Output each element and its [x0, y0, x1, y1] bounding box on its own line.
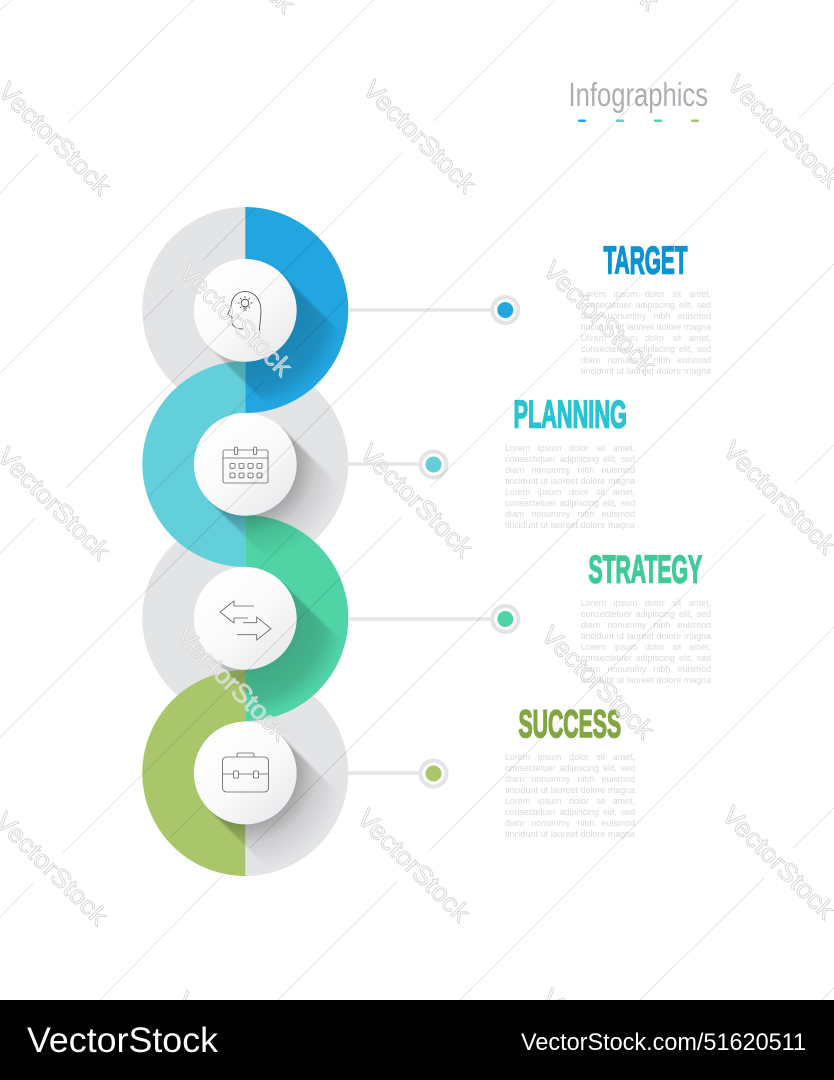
text block: target: tincidunt ut laoreet dolore magna: [581, 366, 711, 376]
text block: strategy: Lorem ipsum dolor sit amet,: [581, 642, 711, 652]
watermark pattern: VectorStock: [173, 257, 299, 383]
long shadows: [208, 274, 336, 859]
text block: planning: consectetuer adipiscing elit, sed: [505, 498, 635, 508]
text block: planning: Lorem ipsum dolor sit amet,: [505, 487, 635, 497]
text block: success: tincidunt ut laoreet dolore magna: [505, 829, 635, 839]
gray half circles: [142, 207, 348, 876]
infographic title: [568, 76, 708, 122]
text block: planning: consectetuer adipiscing elit, sed: [505, 454, 635, 464]
text block: success: consectetuer adipiscing elit, sed: [505, 807, 635, 817]
text block: target: Lorem ipsum dolor sit amet,: [581, 333, 711, 343]
text block: success: [505, 752, 635, 839]
heading: strategy: STRATEGY: [588, 548, 702, 592]
inner white discs: [194, 259, 297, 824]
text block: success: tincidunt ut laoreet dolore magna: [505, 785, 635, 795]
icon: briefcase: [222, 753, 268, 792]
text block: strategy: Lorem ipsum dolor sit amet,: [581, 598, 711, 608]
text block: strategy: tincidunt ut laoreet dolore magna: [581, 675, 711, 685]
watermark pattern: VectorStock: [170, 621, 296, 747]
segment: planning teal half: [142, 361, 245, 567]
text block: planning: [505, 443, 635, 530]
connector and marker: planning: [348, 450, 448, 480]
text block: target: Lorem ipsum dolor sit amet,: [581, 289, 711, 299]
text block: planning: Lorem ipsum dolor sit amet,: [505, 443, 635, 453]
watermark pattern: VectorStock: [354, 438, 480, 564]
footer bar: [0, 1000, 834, 1080]
segment: target blue half: [245, 207, 348, 413]
segment: success olive half: [142, 670, 245, 876]
icon: exchange arrows: [220, 601, 271, 640]
text block: strategy: diam nonummy nibh euismod: [581, 620, 711, 630]
text block: strategy: consectetuer adipiscing elit, sed: [581, 609, 711, 619]
text block: success: consectetuer adipiscing elit, sed: [505, 763, 635, 773]
watermark pattern: VectorStock: [716, 800, 834, 926]
watermark pattern: VectorStock: [351, 803, 477, 929]
text block: target: consectetuer adipiscing elit, sed: [581, 300, 711, 310]
icon: calendar: [223, 447, 268, 483]
watermark pattern: VectorStock: [537, 255, 663, 381]
watermark pattern: VectorStock: [357, 74, 483, 200]
text block: success: diam nonummy nibh euismod: [505, 818, 635, 828]
text block: planning: tincidunt ut laoreet dolore magna: [505, 520, 635, 530]
text block: success: diam nonummy nibh euismod: [505, 774, 635, 784]
text block: success: Lorem ipsum dolor sit amet,: [505, 796, 635, 806]
text block: target: diam nonummy nibh euismod: [581, 355, 711, 365]
heading: target: TARGET: [604, 240, 688, 282]
text block: strategy: diam nonummy nibh euismod: [581, 664, 711, 674]
heading: success: SUCCESS: [518, 703, 621, 746]
text block: planning: tincidunt ut laoreet dolore magna: [505, 476, 635, 486]
icon: head with light bulb: [228, 292, 261, 331]
watermark pattern: VectorStock: [535, 620, 661, 746]
chain of four overlapping circles: [142, 207, 365, 893]
text block: target: [581, 289, 711, 376]
text block: target: consectetuer adipiscing elit, sed: [581, 344, 711, 354]
footer image id: VectorStock.com/51620511: [521, 1029, 806, 1056]
text block: target: diam nonummy nibh euismod: [581, 311, 711, 321]
connector and marker: strategy: [348, 604, 520, 634]
watermark pattern: VectorStock: [717, 435, 834, 561]
text block: strategy: [581, 598, 711, 685]
infographic title: Infographics: [568, 76, 708, 113]
text block: success: Lorem ipsum dolor sit amet,: [505, 752, 635, 762]
text block: planning: diam nonummy nibh euismod: [505, 509, 635, 519]
text block: target: tincidunt ut laoreet dolore magna: [581, 322, 711, 332]
text block: planning: diam nonummy nibh euismod: [505, 465, 635, 475]
text block: strategy: consectetuer adipiscing elit, sed: [581, 653, 711, 663]
connector and marker: target: [348, 295, 520, 325]
footer brand: VectorStock: [27, 1021, 219, 1060]
heading: planning: PLANNING: [514, 394, 627, 436]
segment: strategy green half: [245, 515, 348, 721]
text block: strategy: tincidunt ut laoreet dolore magna: [581, 631, 711, 641]
connector and marker: success: [348, 758, 448, 788]
